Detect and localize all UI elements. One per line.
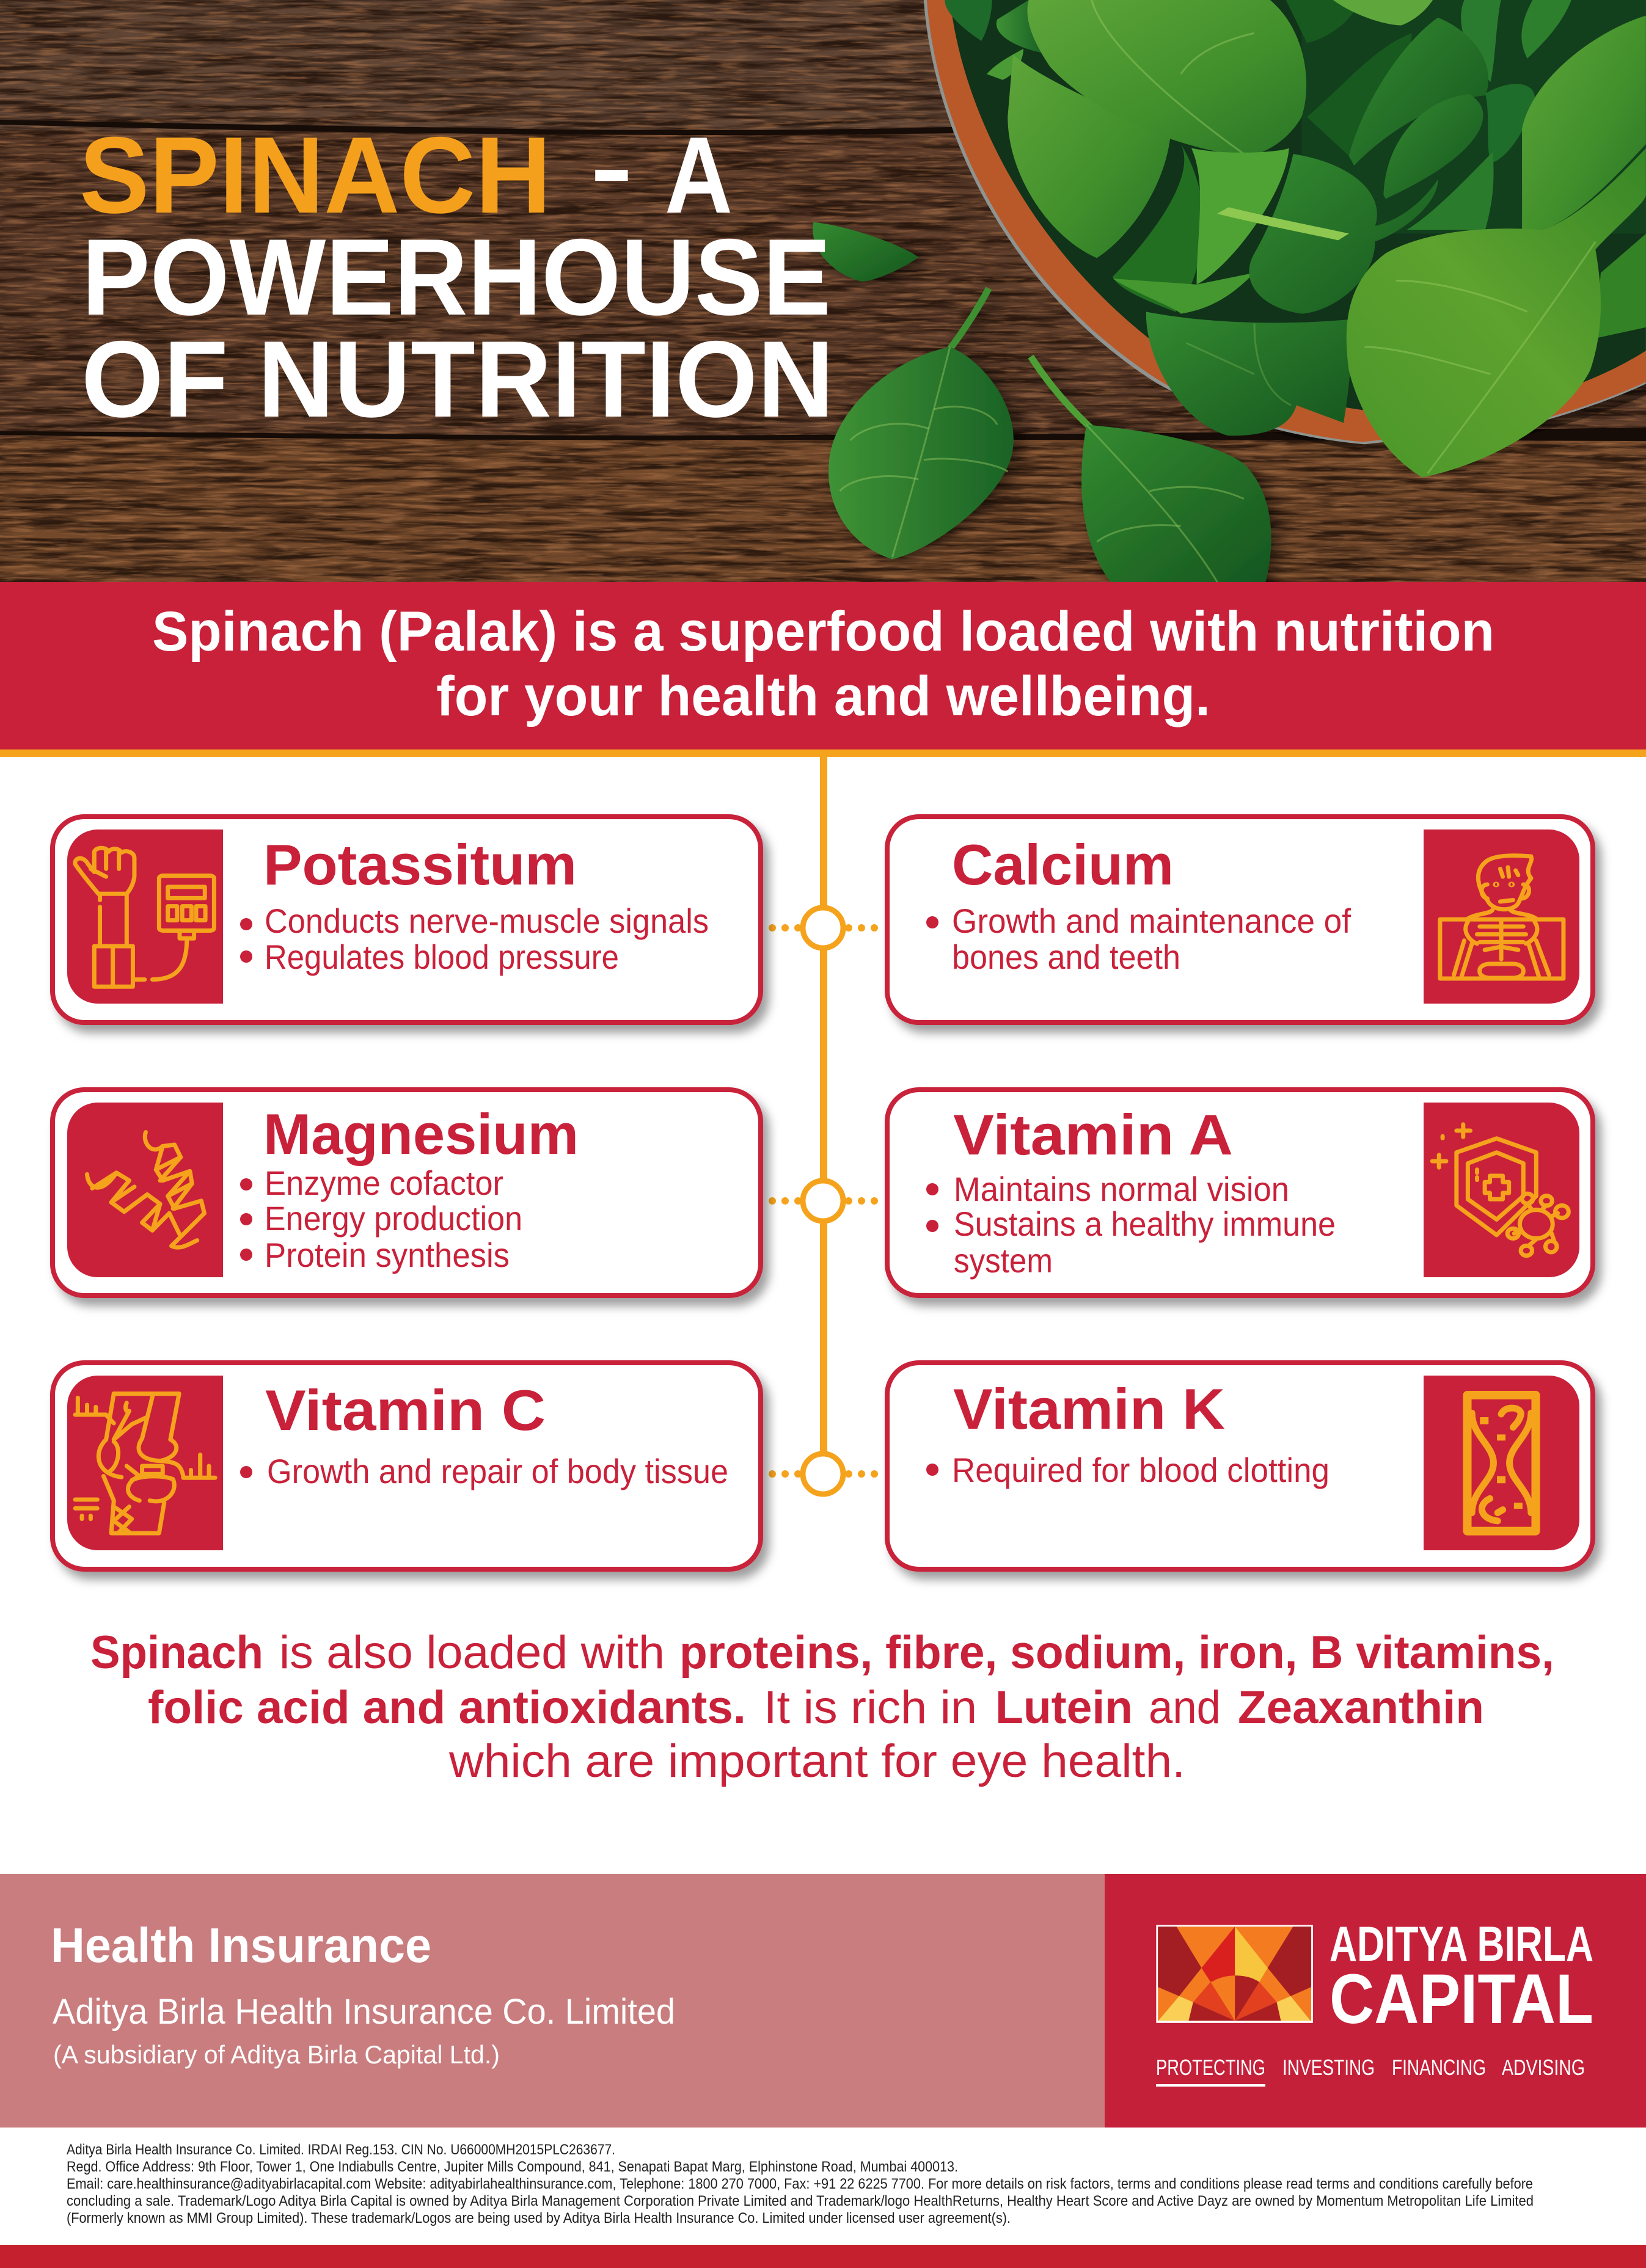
card: Vitamin A: Vitamin A xyxy=(953,1103,1233,1167)
card: Vitamin K xyxy=(887,1363,1593,1569)
terracotta bowl xyxy=(924,0,1646,451)
card: Potassium: Conducts nerve-muscle signals xyxy=(265,902,709,940)
summary paragraph: proteins, fibre, sodium, iron, B vitamins, xyxy=(679,1627,1554,1679)
red intro banner xyxy=(0,582,1646,757)
title: OF NUTRITION xyxy=(81,318,834,440)
summary paragraph: folic acid and antioxidants. xyxy=(148,1682,746,1734)
loose leaf right xyxy=(1031,357,1271,585)
summary paragraph: and xyxy=(1149,1682,1221,1734)
title: SPINACH xyxy=(79,114,551,236)
card: Magnesium: Energy production xyxy=(265,1199,522,1238)
icon: immune shield and virus xyxy=(1432,1125,1568,1256)
legal fine print xyxy=(67,2142,1534,2226)
summary paragraph: Spinach xyxy=(90,1627,263,1679)
central timeline with nodes xyxy=(769,757,878,1494)
card: Vitamin C: Growth and repair of body tissue xyxy=(267,1452,728,1490)
card: Magnesium xyxy=(53,1090,761,1296)
footer panel: health insurance: Health Insurance xyxy=(51,1918,431,1972)
card: Calcium xyxy=(887,817,1593,1023)
summary paragraph xyxy=(90,1627,1554,1787)
summary paragraph: is also loaded with xyxy=(279,1627,665,1679)
icon: protein helix xyxy=(87,1132,204,1247)
card: Potassium: Regulates blood pressure xyxy=(265,938,619,976)
title: POWERHOUSE xyxy=(82,216,831,338)
footer panel: health insurance xyxy=(0,1874,1105,2128)
footer panel: Aditya Birla Capital: FINANCING xyxy=(1392,2055,1486,2080)
legal fine print: Email: care.healthinsurance@adityabirlacapital.com Website: adityabirlahealthinsurance.com, Telephone: 1800 270 7000, Fax: +91 22 6225 7700. For more details on risk factors, terms and conditions please read terms and conditions carefully before xyxy=(67,2176,1533,2192)
card: Vitamin C xyxy=(53,1363,761,1569)
card: Vitamin C: Vitamin C xyxy=(265,1378,546,1442)
card: Vitamin K: Required for blood clotting xyxy=(952,1451,1330,1489)
summary paragraph: Zeaxanthin xyxy=(1238,1682,1484,1734)
card: Magnesium: Enzyme cofactor xyxy=(265,1164,503,1202)
loose leaf left xyxy=(828,288,1014,560)
title: - xyxy=(590,116,633,219)
footer panel: Aditya Birla Capital: CAPITAL xyxy=(1330,1960,1593,2038)
card: Vitamin A: Maintains normal vision xyxy=(954,1170,1289,1208)
legal fine print: Regd. Office Address: 9th Floor, Tower 1, One Indiabulls Centre, Jupiter Mills Compound, 841, Senapati Bapat Marg, Elphinstone Road, Mumbai 400013. xyxy=(67,2159,958,2175)
legal fine print: concluding a sale. Trademark/Logo Aditya Birla Capital is owned by Aditya Birla Management Corporation Private Limited and Trademark/logo HealthReturns, Healthy Heart Score and Active Dayz are owned by Momentum Metropolitan Life Limited xyxy=(67,2193,1534,2209)
legal fine print: (Formerly known as MMI Group Limited). These trademark/Logos are being used by Aditya Birla Health Insurance Co. Limited under licensed user agreement(s). xyxy=(67,2210,1011,2226)
legal fine print: Aditya Birla Health Insurance Co. Limited. IRDAI Reg.153. CIN No. U66000MH2015PLC263677. xyxy=(67,2142,615,2158)
icon: x-ray skeleton xyxy=(1440,856,1564,979)
summary paragraph: which are important for eye health. xyxy=(448,1735,1185,1787)
card: Calcium: Calcium xyxy=(952,833,1174,897)
card: Vitamin A: Sustains a healthy immune xyxy=(954,1205,1336,1243)
footer panel: Aditya Birla Capital xyxy=(1105,1874,1646,2128)
leaf pile in bowl xyxy=(945,0,1646,478)
hero photo: spinach bowl on wooden table xyxy=(0,0,1646,585)
card: Vitamin A xyxy=(887,1090,1593,1296)
footer panel: Aditya Birla Capital: ADVISING xyxy=(1502,2055,1585,2080)
card: Vitamin K: Vitamin K xyxy=(953,1377,1225,1441)
summary paragraph: Lutein xyxy=(995,1682,1133,1734)
bottom red bar xyxy=(0,2245,1646,2268)
card: Calcium: bones and teeth xyxy=(952,938,1180,976)
small loose leaf xyxy=(813,222,918,282)
wooden table planks xyxy=(0,0,1646,582)
title xyxy=(79,114,834,440)
icon: hourglass xyxy=(1468,1395,1535,1531)
title: A xyxy=(665,114,733,236)
card: Calcium: Growth and maintenance of xyxy=(952,902,1351,940)
icon: wrist and blood pressure monitor xyxy=(75,848,214,986)
footer panel: Aditya Birla Capital: INVESTING xyxy=(1282,2055,1375,2080)
card: Vitamin A: system xyxy=(954,1241,1053,1280)
red intro banner: Spinach (Palak) is a superfood loaded with nutrition xyxy=(152,600,1494,663)
card: Potassium: Potassitum xyxy=(263,833,577,897)
card: Magnesium: Magnesium xyxy=(263,1102,579,1166)
logo mark xyxy=(1156,1925,1313,2023)
red intro banner: for your health and wellbeing. xyxy=(436,665,1210,727)
icon: knee joint xyxy=(75,1394,215,1533)
footer panel: health insurance: (A subsidiary of Aditya Birla Capital Ltd.) xyxy=(53,2040,500,2069)
card: Magnesium: Protein synthesis xyxy=(265,1236,510,1274)
card: Potassium xyxy=(53,817,761,1023)
footer panel: health insurance: Aditya Birla Health Insurance Co. Limited xyxy=(53,1992,675,2032)
footer panel: Aditya Birla Capital: PROTECTING xyxy=(1156,2055,1265,2080)
summary paragraph: It is rich in xyxy=(764,1682,977,1734)
